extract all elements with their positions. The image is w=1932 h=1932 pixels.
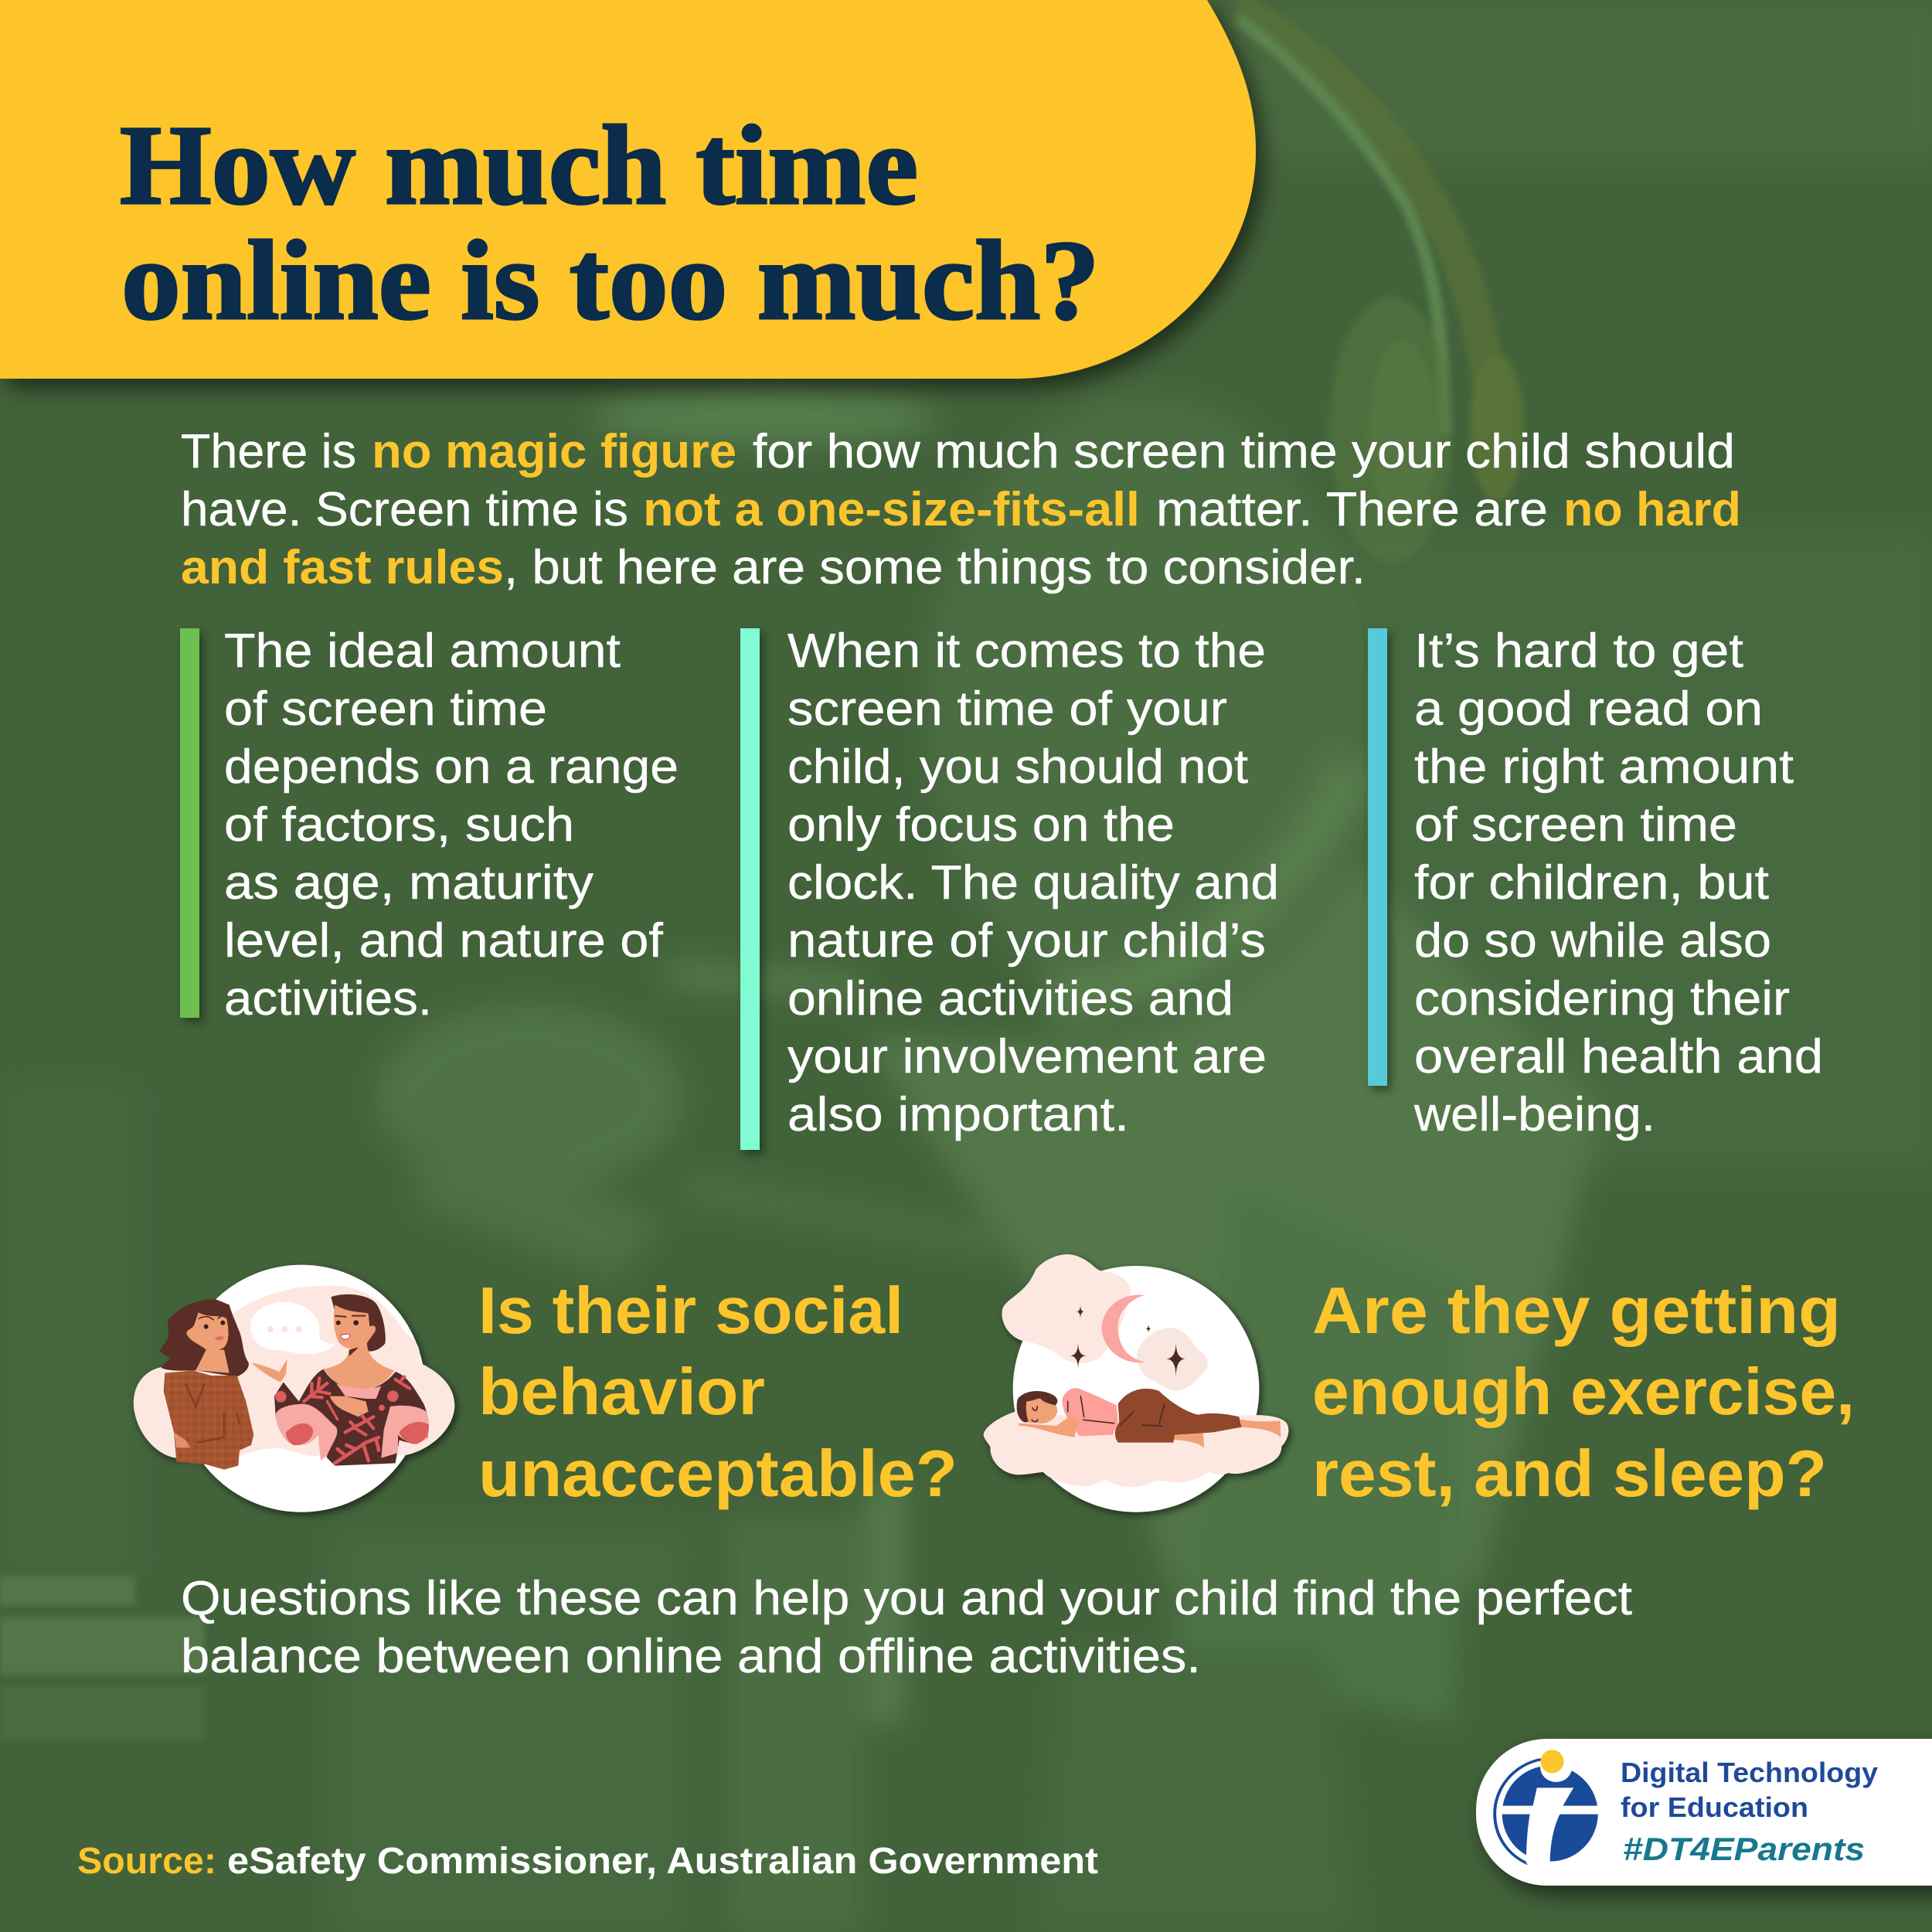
column 3: health and well-being: It’s hard to get [1414,624,1743,678]
logo text: Digital Technology [1621,1757,1878,1788]
column 2: quality and involvement: clock. The quality and [787,856,1279,910]
intro paragraph: There is [181,425,356,478]
icon: person sleeping on cloud under moon [984,1254,1288,1512]
intro paragraph: matter. There are [1156,483,1548,536]
column 2: quality and involvement: online activities and [787,972,1233,1026]
title: How much time [120,102,918,228]
closing text: Questions like these can help you and your child find the perfect [181,1572,1632,1625]
header banner [0,0,1256,379]
source line: Source: [77,1841,216,1882]
heading: social behavior: behavior [478,1355,765,1429]
column 2: quality and involvement: your involvement are [787,1030,1267,1083]
keyboard blur [0,1577,205,1740]
title [120,102,1100,343]
logo text: #DT4EParents [1623,1831,1865,1867]
column 1: ideal amount [180,624,679,1026]
column 2: quality and involvement: only focus on the [787,798,1175,852]
intro paragraph [181,425,1741,594]
column 3: health and well-being: well-being. [1413,1088,1655,1141]
column 2: quality and involvement [740,624,1279,1150]
column 3: health and well-being: overall health and [1414,1030,1823,1083]
intro paragraph: have. Screen time is [181,483,628,536]
column 2: quality and involvement: screen time of your [787,682,1227,736]
intro paragraph: no hard [1563,483,1741,536]
column 3: health and well-being: do so while also [1414,914,1771,968]
source line: eSafety Commissioner, Australian Government [227,1841,1098,1882]
heading: exercise, rest, sleep: Are they getting [1312,1274,1841,1348]
icon: Digital Technology for Education logo [1495,1750,1600,1864]
heading: exercise, rest, sleep: enough exercise, [1312,1355,1855,1429]
closing text [181,1572,1632,1683]
column 3: health and well-being: the right amount [1414,740,1794,794]
logo badge [1476,1739,1932,1886]
column 1: ideal amount: of screen time [224,682,547,736]
column 1: ideal amount: depends on a range [224,740,679,794]
heading: exercise, rest, sleep [1312,1274,1855,1511]
closing text: balance between online and offline activities. [181,1630,1201,1683]
intro paragraph: and fast rules [181,541,504,594]
logo text [1621,1757,1878,1867]
column 3: health and well-being: considering their [1414,972,1790,1026]
column 1: ideal amount: level, and nature of [224,914,664,968]
intro paragraph: no magic figure [372,425,736,478]
column 3: health and well-being: for children, but [1414,856,1769,910]
column 1: ideal amount: of factors, such [224,798,574,852]
column 1: ideal amount: activities. [224,972,432,1026]
heading: exercise, rest, sleep: rest, and sleep? [1312,1437,1827,1511]
logo text: for Education [1621,1791,1808,1823]
column 1: ideal amount: as age, maturity [224,856,594,910]
column 2: quality and involvement: also important. [787,1088,1129,1141]
heading: social behavior: Is their social [478,1274,903,1348]
title: online is too much? [121,217,1100,343]
heading: social behavior [478,1274,957,1511]
heading: social behavior: unacceptable? [478,1437,957,1511]
column 2: quality and involvement: child, you should not [787,740,1248,794]
icon: two women talking [134,1265,454,1512]
column 3: health and well-being: a good read on [1414,682,1763,736]
intro paragraph: , but here are some things to consider. [504,541,1366,594]
intro paragraph: for how much screen time your child should [753,425,1735,478]
intro paragraph: not a one-size-fits-all [643,483,1140,536]
column 3: health and well-being: of screen time [1414,798,1737,852]
column 2: quality and involvement: nature of your child’s [787,914,1266,968]
headphones [1236,8,1524,563]
column 3: health and well-being [1368,624,1823,1141]
column 1: ideal amount: The ideal amount [224,624,621,678]
column 2: quality and involvement: When it comes to the [787,624,1266,678]
